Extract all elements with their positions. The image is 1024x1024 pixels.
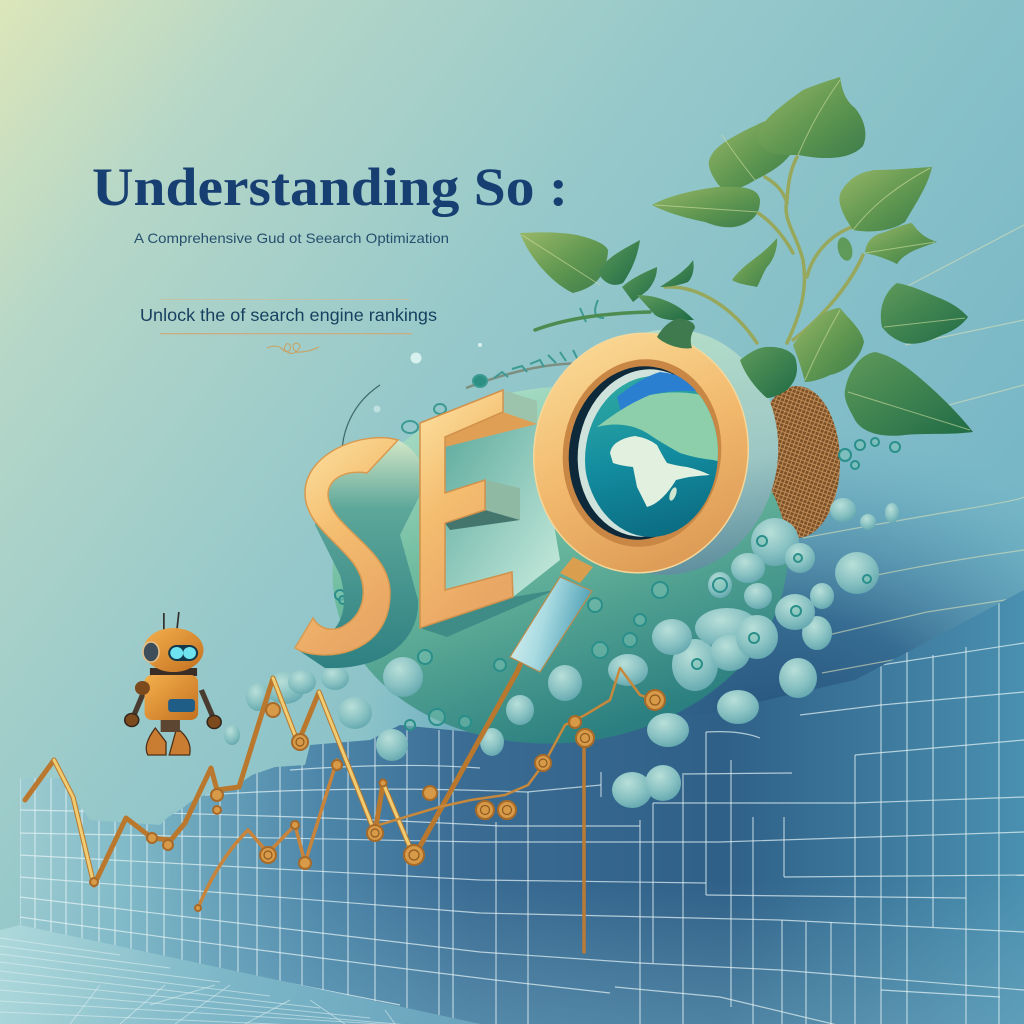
neck (150, 668, 197, 676)
madagascar (669, 487, 677, 501)
perspective floor (0, 925, 478, 1024)
sparkle dots (374, 343, 482, 412)
lens opening (558, 357, 724, 549)
tagline lower rule (160, 333, 412, 334)
leaf veins (522, 80, 970, 430)
globe ocean (585, 376, 725, 544)
floor lines (0, 938, 402, 1024)
E top arm end (503, 390, 537, 424)
illustration: bubbles (224, 498, 899, 808)
E middle arm underside (445, 510, 520, 530)
leaf: centre (793, 308, 864, 382)
subtitle: A Comprehensive Gud ot Seearch Optimization (134, 230, 449, 246)
S face (295, 438, 398, 655)
tagline text: Unlock the of search engine rankings (140, 305, 437, 325)
leaf: lower right (845, 352, 973, 436)
thin support line (582, 745, 586, 952)
robot (125, 612, 221, 755)
tagline (140, 299, 437, 353)
leaf: far left big (520, 232, 608, 293)
E shadow base (420, 590, 555, 637)
globe (585, 372, 725, 544)
ear (143, 642, 159, 662)
antennae (164, 612, 179, 635)
eye visor (168, 645, 198, 661)
main line highlight (54, 678, 414, 885)
illustration: small swirl rings (335, 438, 900, 730)
lens extrusion (542, 315, 794, 589)
legs (161, 718, 180, 732)
leaf: cluster three (660, 260, 694, 287)
S extrusion (295, 440, 424, 668)
leaf: tiny (835, 236, 855, 262)
E middle arm end (485, 480, 520, 520)
illustration: magnifying glass (510, 315, 794, 672)
secondary line (198, 760, 337, 908)
illustration: letter S (295, 438, 424, 668)
eyes (170, 647, 196, 659)
leaf: right small (865, 223, 937, 264)
E face (420, 390, 513, 628)
ornament (267, 343, 319, 353)
planet body (315, 364, 805, 766)
body (145, 675, 198, 720)
leaf: over lens (740, 347, 797, 398)
illustration: woven basket (754, 386, 840, 538)
pulley inner swirls (264, 695, 660, 860)
chart grid wall (0, 590, 1024, 1024)
background light rays (803, 225, 1024, 673)
wall lower lightening (256, 914, 1024, 1024)
leaf: right (881, 283, 968, 344)
leaf: top (758, 77, 865, 158)
lens glare (567, 360, 725, 546)
tertiary line (372, 668, 655, 827)
feet (146, 728, 190, 755)
leaf: far left (652, 187, 760, 227)
stems (535, 157, 863, 343)
tagline upper rule (160, 299, 410, 300)
head (144, 628, 203, 672)
main line shadow (25, 665, 520, 885)
grid lines (20, 597, 1024, 1024)
leaf: cluster two (622, 267, 657, 302)
gold line chart (25, 665, 665, 952)
leaf: upper right (839, 167, 932, 231)
illustration: green planet (315, 300, 805, 766)
hands (125, 714, 221, 728)
arctic blue (617, 372, 696, 410)
illustration: letter E (420, 390, 560, 637)
leaf: upper left (709, 121, 790, 190)
illustration: plant (520, 77, 973, 436)
leaf: small centre (732, 238, 777, 287)
handle neck (560, 557, 593, 583)
title: Understanding So : (92, 157, 568, 217)
arms (133, 690, 214, 720)
wall surface (0, 590, 1024, 1024)
africa (610, 436, 710, 507)
pulleys (90, 690, 665, 911)
chest screen (168, 699, 195, 712)
floating glyphs rim (402, 300, 604, 433)
lens gold ring (518, 319, 764, 587)
planet rim (466, 364, 590, 388)
leaf: cluster one (598, 240, 640, 285)
orbit thin arc (342, 385, 380, 480)
leaf: over ring (657, 318, 695, 348)
land north (597, 392, 722, 462)
leaf: cluster four (637, 295, 694, 320)
handle grip (510, 577, 592, 672)
shoulder joint (135, 681, 150, 695)
ring inner bevel (551, 349, 733, 557)
E top arm underside (445, 412, 537, 447)
floor surface (0, 925, 478, 1024)
E recess (445, 424, 560, 597)
